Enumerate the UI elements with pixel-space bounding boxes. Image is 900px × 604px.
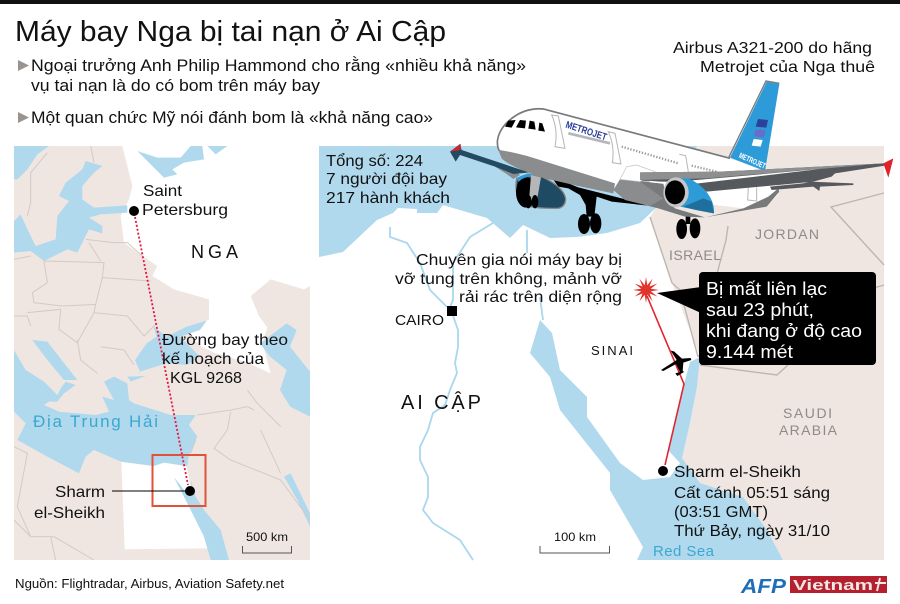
fuselage [497, 109, 780, 217]
label: planned route: kế hoạch của [162, 351, 264, 368]
label: Red Sea: Red Sea [653, 543, 715, 560]
logo: AFP: AFP [740, 576, 787, 598]
label: aircraft type: Metrojet của Nga thuê [700, 59, 875, 76]
marker: Sharm el-Sheikh departure: Cất cánh 05:51 sáng [674, 485, 830, 502]
label: aircraft type [673, 40, 875, 76]
label: experts statement [395, 252, 623, 306]
marker: Cairo: CAIRO [395, 312, 444, 329]
main gear [552, 177, 652, 234]
marker: Sharm el-Sheikh: Sharm [55, 484, 105, 501]
callout: loss of contact: 9.144 mét [706, 342, 793, 362]
tail fin: METROJET [738, 151, 767, 171]
marker: Sharm el-Sheikh departure [658, 464, 830, 540]
near wing [640, 158, 893, 192]
scale bar: 500 km [242, 530, 292, 553]
near side gear [676, 216, 700, 239]
marker: Sharm el-Sheikh departure: Sharm el-Sheikh [674, 464, 801, 481]
marker: Sharm el-Sheikh departure: Thứ Bảy, ngày 31/10 [674, 523, 830, 540]
label: crew and passengers [326, 152, 450, 207]
marker: Sharm el-Sheikh [34, 484, 195, 522]
sea: Gulf of Suez and Red Sea [530, 320, 783, 560]
label: NGA: NGA [191, 242, 238, 262]
label: Saudi Arabia [779, 405, 838, 438]
label: aircraft type: Airbus A321-200 do hãng [673, 40, 872, 57]
text block: key points [18, 56, 526, 127]
marker: Saint Petersburg: Petersburg [142, 202, 228, 219]
doors and windows [552, 115, 757, 201]
label: experts statement: rải rác trên diện rộng [459, 289, 622, 306]
tail fin [728, 81, 779, 171]
flight path: planned route [135, 217, 188, 485]
label: planned route: Đường bay theo [162, 332, 288, 349]
callout: loss of contact: khi đang ở độ cao [706, 321, 862, 341]
near engine [663, 177, 714, 213]
label: Sinai: SINAI [591, 343, 633, 358]
label: Saudi Arabia: ARABIA [779, 422, 838, 438]
label: Israel: ISRAEL [669, 247, 721, 263]
marker: Saint Petersburg: Saint [143, 183, 183, 200]
borders [650, 193, 884, 375]
land: Israel, Jordan, Saudi Arabia [650, 146, 884, 560]
label: Ai Cap: AI CẬP [401, 391, 481, 414]
source line: Nguồn: Flightradar, Airbus, Aviation Safety.net [15, 576, 284, 591]
panel: detail map [319, 146, 884, 560]
illustration: Metrojet airplane [450, 81, 893, 239]
river: Nile and canal [390, 223, 543, 560]
marker: Sharm el-Sheikh: el-Sheikh [34, 505, 105, 522]
label: crew and passengers: 7 người đội bay [326, 171, 447, 188]
label: Saudi Arabia: SAUDI [783, 405, 832, 421]
label: Jordan: JORDAN [755, 226, 819, 242]
logo: Vietnam+: Vietnam [793, 577, 873, 594]
far engine and gear [516, 174, 566, 208]
scale bar: 500 km: 500 km [246, 530, 288, 544]
callout: loss of contact: Bị mất liên lạc [706, 279, 827, 299]
sea: Mediterranean [319, 146, 697, 257]
title: Máy bay Nga bị tai nạn ở Ai Cập [15, 16, 446, 48]
label: Mediterranean: Địa Trung Hải [33, 412, 158, 431]
callout: loss of contact: sau 23 phút, [706, 300, 814, 320]
panel: overview map [14, 146, 310, 560]
scale bar: 100 km [540, 530, 610, 553]
label: experts statement: vỡ tung trên không, mảnh vỡ [395, 271, 623, 288]
marker: Sharm el-Sheikh departure: (03:51 GMT) [674, 504, 768, 521]
callout: loss of contact [657, 272, 876, 365]
text block: key points: Một quan chức Mỹ nói đánh bom là «khả năng cao» [31, 108, 433, 127]
label: experts statement: Chuyên gia nói máy bay bị [416, 252, 622, 269]
icon: crash burst [633, 277, 659, 303]
marker: Saint Petersburg [129, 183, 228, 219]
cockpit windows [505, 120, 545, 132]
text block: key points: Ngoại trưởng Anh Philip Hammond cho rằng «nhiều khả năng» [31, 56, 526, 75]
scale bar: 100 km: 100 km [554, 530, 596, 544]
label: planned route: KGL 9268 [170, 370, 242, 387]
label: planned route [162, 332, 288, 387]
flight path: actual route [647, 296, 684, 465]
icon: small plane [661, 351, 691, 376]
fuselage logo: METROJET [564, 120, 608, 143]
label: crew and passengers: Tổng số: 224 [326, 152, 423, 170]
inset locator box [152, 455, 206, 506]
marker: Cairo [395, 306, 457, 329]
text block: key points: vụ tai nạn là do có bom trên máy bay [31, 76, 321, 95]
logo: Vietnam+ [790, 576, 887, 594]
label: crew and passengers: 217 hành khách [326, 190, 450, 207]
far wing [450, 144, 530, 179]
